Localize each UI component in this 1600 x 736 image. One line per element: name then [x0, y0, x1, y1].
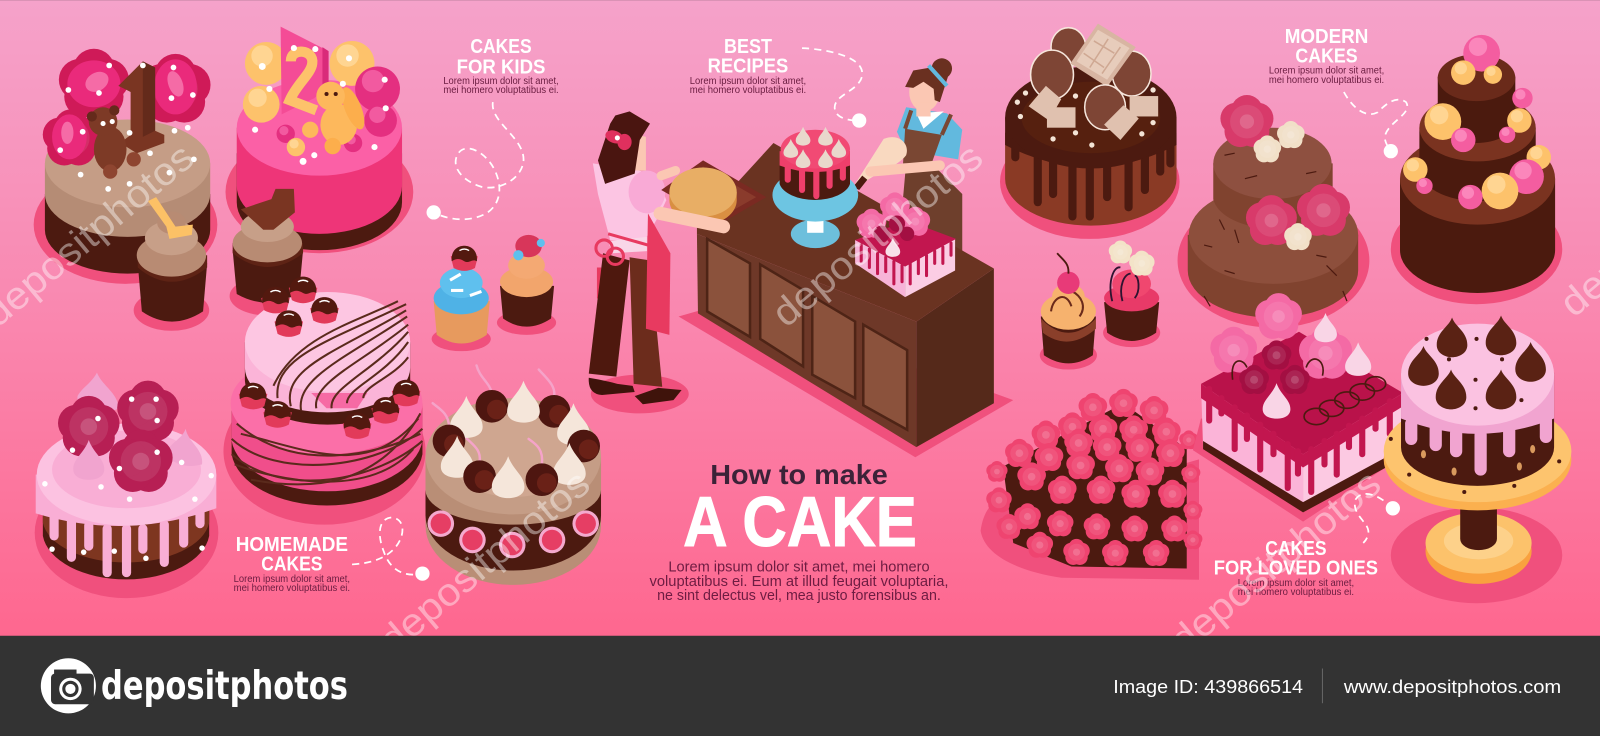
cake: square with red glaze — [1193, 293, 1403, 522]
label: best recipes: RECIPES — [708, 56, 788, 78]
title: A CAKE — [683, 482, 917, 561]
label: homemade cakes: HOMEMADE — [236, 534, 348, 556]
label: modern cakes: MODERN — [1285, 26, 1368, 48]
label: cakes for loved ones: Lorem ipsum dolor sit amet, — [1238, 578, 1354, 589]
label: cakes for kids: mei homero voluptatibus ei. — [443, 85, 559, 96]
label: best recipes: Lorem ipsum dolor sit amet, — [690, 76, 806, 87]
label: homemade cakes — [234, 534, 350, 594]
intro text: Lorem ipsum dolor sit amet, mei homero — [668, 560, 930, 576]
intro text — [649, 560, 948, 604]
cake: chocolate with cookies — [1000, 24, 1180, 239]
watermarks: depositphotos — [764, 135, 991, 336]
small square cake on counter — [855, 192, 956, 297]
watermarks: depositphotos — [371, 462, 598, 662]
intro text: voluptatibus ei. Eum at illud feugait voluptaria, — [649, 574, 948, 590]
path: best recipes — [802, 48, 866, 128]
cake: birthday one with bear — [34, 49, 217, 284]
cake: pink one with dog and number 2 — [226, 27, 413, 253]
label: cakes for kids: Lorem ipsum dolor sit amet, — [443, 76, 559, 87]
label: cakes for kids — [443, 36, 559, 96]
website url: www.depositphotos.com — [1343, 676, 1561, 697]
label: best recipes: BEST — [724, 36, 772, 58]
cake on orange stand — [1384, 315, 1571, 603]
logo wordmark: depositphotos — [101, 664, 348, 709]
label: cakes for loved ones: FOR LOVED ONES — [1214, 558, 1378, 580]
cupcake with cream roses — [1103, 241, 1160, 347]
cake: two-tier chocolate with roses — [1178, 95, 1369, 328]
footer bar — [0, 636, 1600, 736]
label: best recipes: mei homero voluptatibus ei. — [690, 85, 806, 96]
baker behind counter — [853, 58, 962, 255]
cupcake with chocolate number 2 — [230, 189, 305, 315]
cupcake with blue frosting — [432, 246, 491, 351]
label: cakes for loved ones: CAKES — [1265, 538, 1327, 560]
label: modern cakes: Lorem ipsum dolor sit amet, — [1269, 66, 1384, 77]
label: modern cakes: mei homero voluptatibus ei. — [1269, 75, 1384, 86]
label: homemade cakes: CAKES — [261, 554, 322, 576]
label: best recipes — [690, 36, 806, 96]
label: cakes for loved ones: mei homero voluptatibus ei. — [1238, 587, 1354, 598]
label: cakes for kids: FOR KIDS — [457, 57, 545, 79]
watermarks — [0, 125, 1600, 662]
watermarks: depositphotos — [1162, 462, 1389, 662]
path: homemade cakes — [352, 517, 430, 581]
label: modern cakes — [1269, 26, 1384, 86]
label: homemade cakes: mei homero voluptatibus ei. — [234, 583, 350, 594]
path: cakes for loved ones — [1355, 494, 1400, 543]
baker with tray — [589, 111, 766, 413]
cake: pink two-tier with chocolate drizzle — [223, 277, 426, 525]
cupcake with cherry — [1040, 253, 1097, 370]
cake: three-tier chocolate with balls — [1391, 35, 1562, 304]
label: modern cakes: CAKES — [1295, 45, 1358, 67]
kitchen counter — [679, 143, 1013, 457]
label: homemade cakes: Lorem ipsum dolor sit amet, — [234, 574, 350, 585]
label: cakes for loved ones — [1214, 538, 1378, 598]
cupcake with yellow number 1 — [134, 197, 209, 331]
title — [683, 459, 917, 561]
cake on blue stand — [772, 127, 858, 248]
cake: cherries and cream — [426, 365, 601, 585]
image id: Image ID: 439866514 — [1113, 676, 1303, 697]
path: modern cakes — [1344, 92, 1407, 158]
intro text: ne sint delectus vel, mea justo forensibus an. — [657, 588, 941, 604]
title: How to make — [710, 459, 888, 490]
cake: drip with roses and meringues — [35, 373, 218, 598]
cake: heart of roses — [981, 389, 1202, 580]
cupcake with orange frosting — [497, 235, 556, 335]
logo icon: camera — [41, 658, 96, 713]
separator — [1322, 669, 1323, 703]
path: cakes for kids — [427, 102, 524, 220]
label: cakes for kids: CAKES — [470, 36, 532, 58]
